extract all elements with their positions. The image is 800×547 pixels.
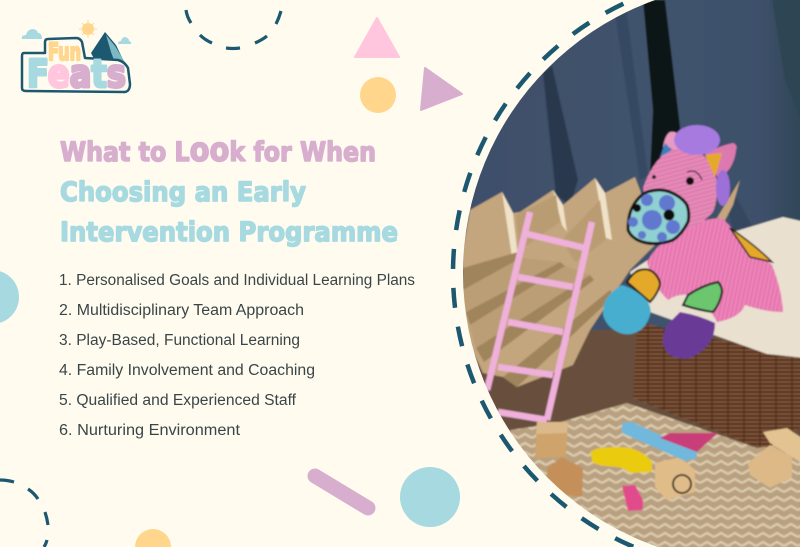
blue hoof [603, 285, 651, 334]
muzzle [628, 190, 689, 244]
magenta triangle [660, 433, 718, 452]
pink block [622, 485, 643, 511]
item 6: 6. Nurturing Environment [59, 422, 241, 439]
item 5: 5. Qualified and Experienced Staff [59, 392, 297, 409]
icon: sun [79, 20, 97, 38]
decorative dashed arc: top [186, 10, 281, 48]
horse body [647, 218, 783, 322]
left ear [663, 132, 680, 150]
right ear [705, 143, 737, 178]
shape: pink triangle [355, 18, 399, 57]
cardboard tube shadows [463, 252, 614, 387]
shape: yellow circle bottom [135, 529, 171, 547]
eye [686, 177, 694, 185]
cardboard tubes [463, 177, 740, 387]
horse [603, 125, 783, 359]
curtain [463, 0, 800, 331]
icon: left cloud [22, 29, 42, 39]
logo outline blob [22, 38, 130, 92]
item 2: 2. Multidisciplinary Team Approach [59, 302, 304, 319]
icon: mountain [91, 32, 128, 70]
title [60, 130, 398, 248]
wooden block A [534, 432, 568, 458]
basket liner [630, 217, 800, 358]
yellow arc [590, 447, 652, 473]
logo: Fun Feats [22, 20, 131, 96]
title line 1: What to Look for When [60, 130, 376, 169]
pink ladder [487, 212, 592, 420]
item 4: 4. Family Involvement and Coaching [59, 362, 315, 379]
cardboard flaps [502, 178, 612, 258]
floor [475, 330, 800, 449]
ear inner [705, 153, 722, 177]
photo: toy horse in basket with blocks [455, 0, 800, 547]
shape: teal circle bottom [400, 467, 460, 527]
shape: teal circle left [0, 270, 19, 324]
mane [674, 125, 720, 155]
blue ear patch [660, 143, 672, 157]
wooden block L [748, 445, 792, 488]
decorative dashed arc: bottom left [0, 480, 48, 547]
head [643, 148, 717, 228]
purple hoof [663, 312, 715, 359]
cardboard behind horse [717, 180, 740, 226]
list of six criteria [59, 272, 415, 439]
logo text: Feats: Feats [27, 52, 126, 96]
logo text: Fun: Fun [48, 38, 81, 66]
saddle patch [730, 228, 772, 262]
icon: right cloud [118, 37, 131, 44]
title line 2: Choosing an Early [60, 177, 306, 208]
dashed circle around photo [453, 0, 800, 547]
blocks and toys [535, 422, 800, 511]
wooden block O [655, 457, 695, 500]
shape: mauve pill [315, 476, 368, 508]
item 3: 3. Play-Based, Functional Learning [59, 332, 300, 349]
muzzle spots [628, 194, 680, 242]
rug [510, 403, 800, 547]
title line 3: Intervention Programme [60, 217, 398, 248]
shape: yellow circle [360, 77, 396, 113]
item 1: 1. Personalised Goals and Individual Learning Plans [59, 272, 415, 289]
blue bar [622, 422, 697, 461]
shape: mauve triangle [421, 68, 462, 110]
wicker basket [633, 322, 800, 447]
wooden block E [547, 457, 583, 497]
right arm cuff [683, 282, 722, 312]
nostrils [664, 210, 674, 220]
left arm cuff [627, 269, 660, 302]
